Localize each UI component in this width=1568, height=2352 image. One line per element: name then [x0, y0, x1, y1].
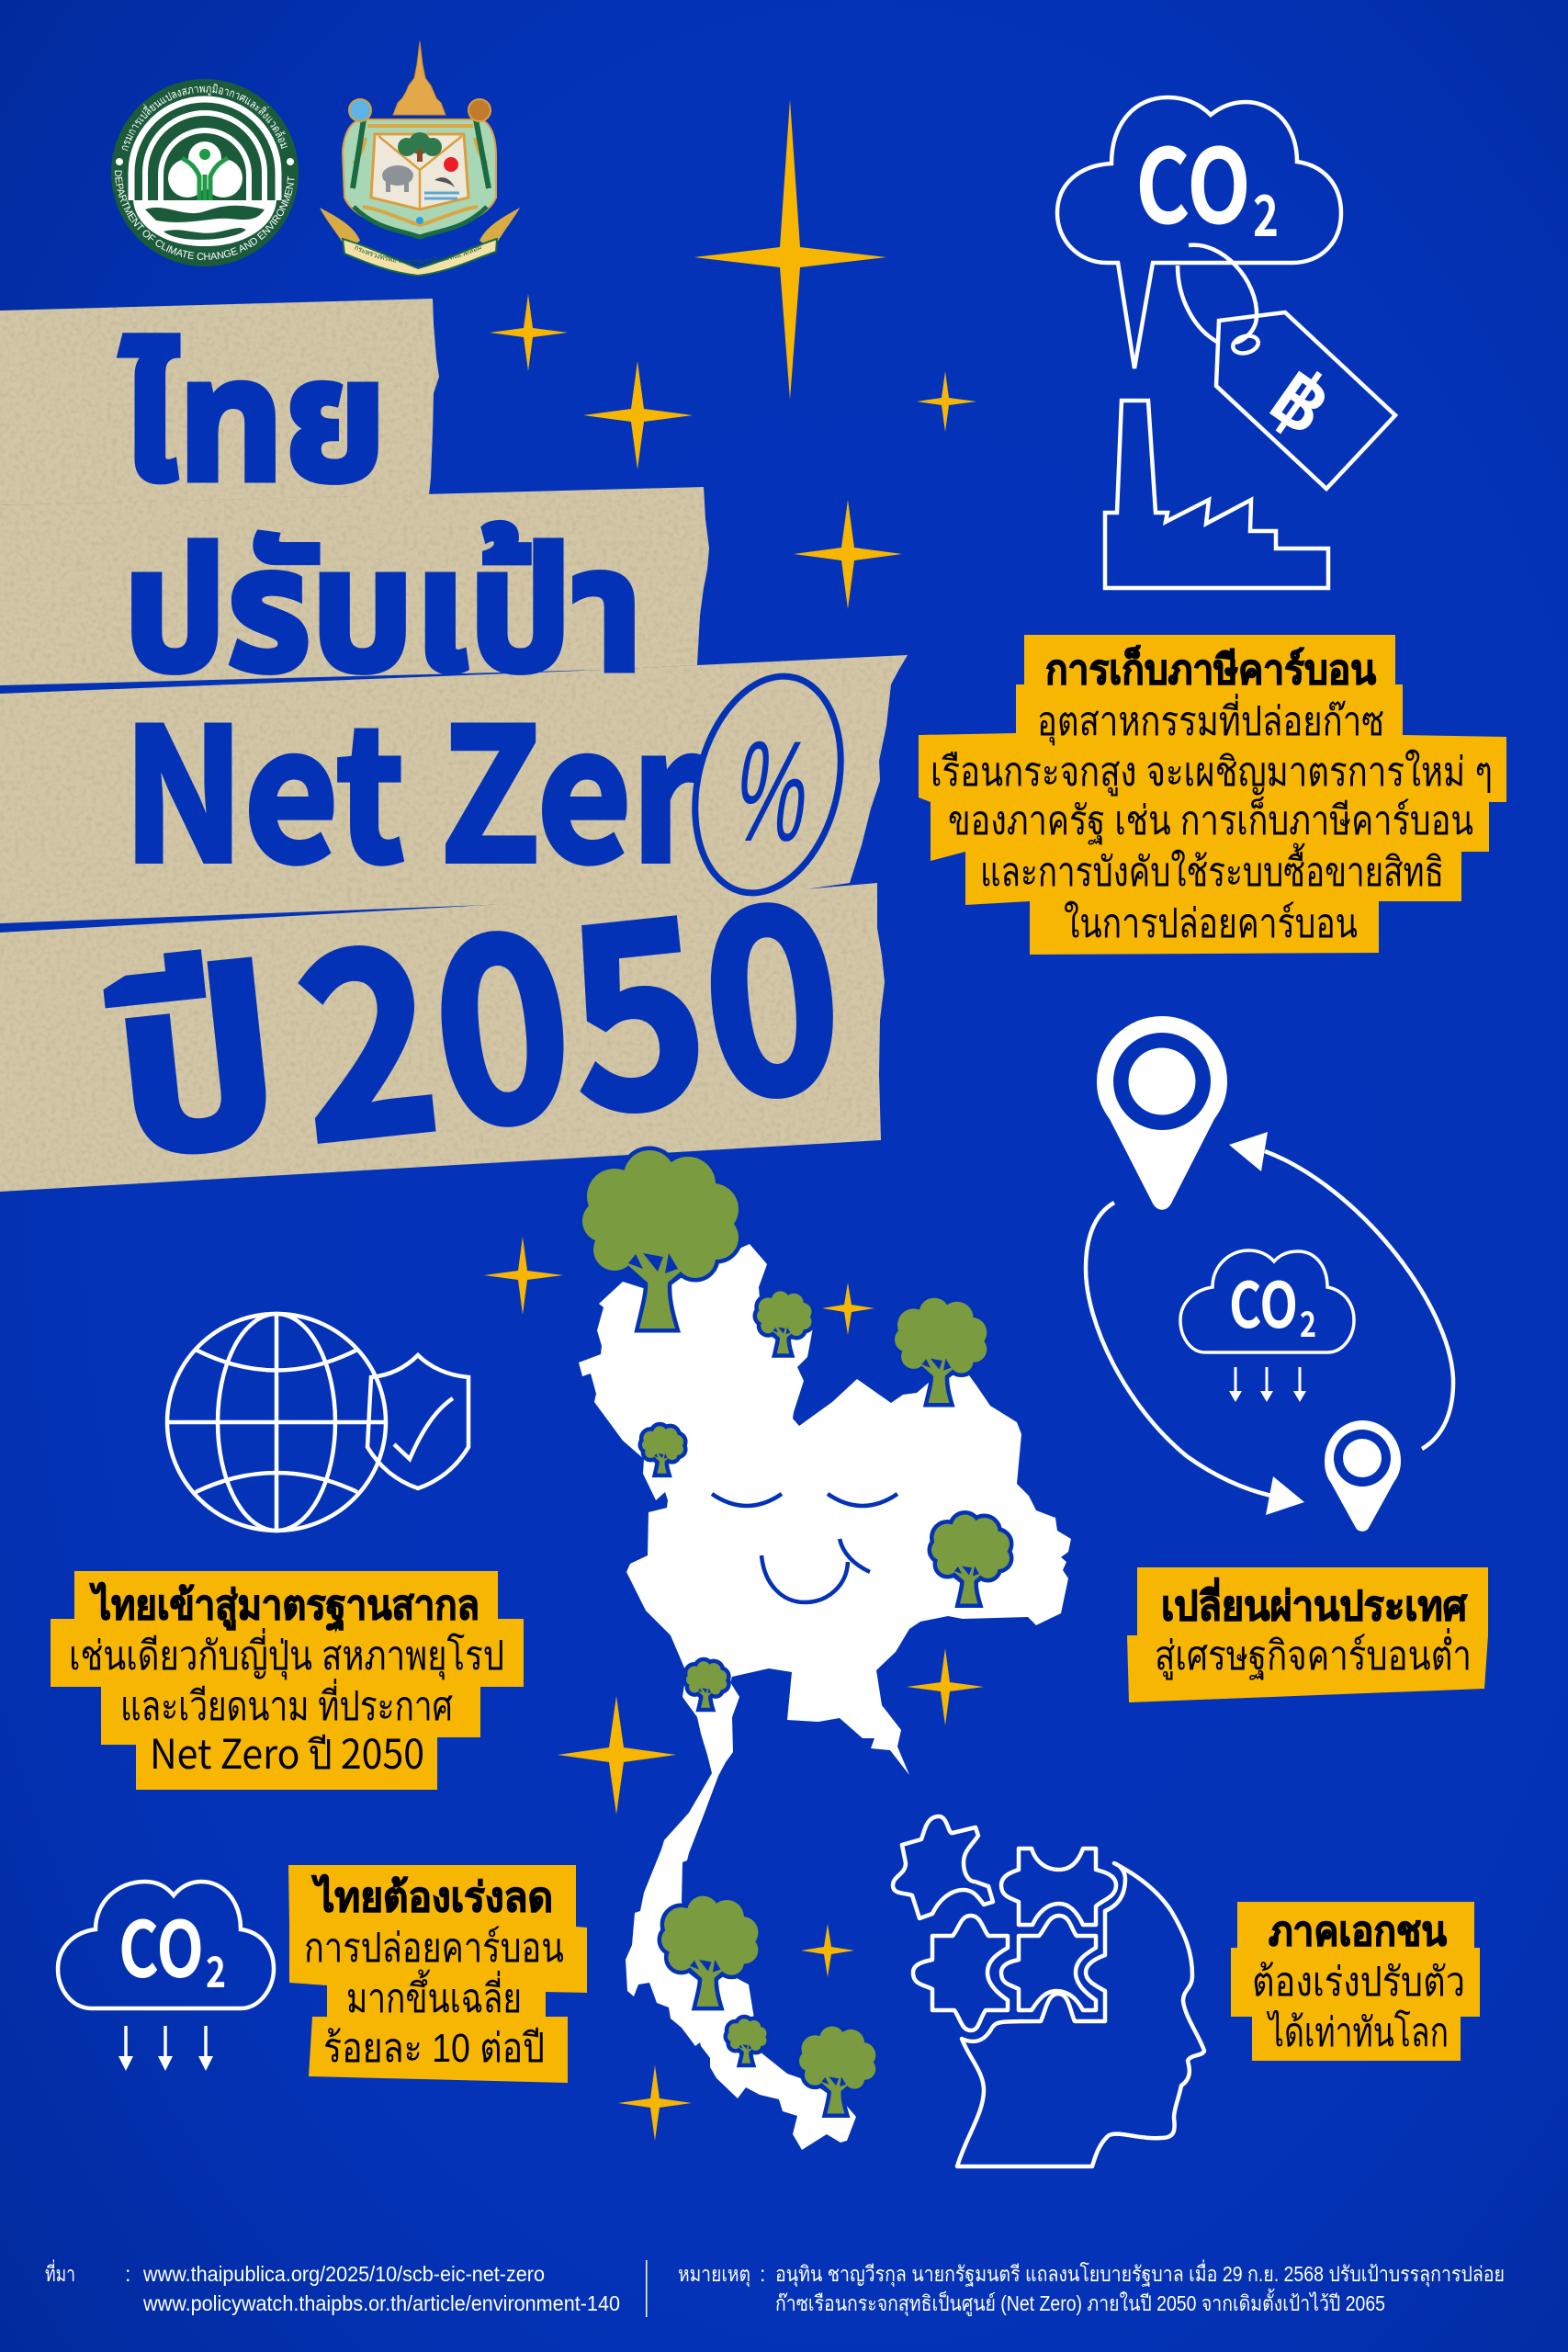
title — [94, 297, 863, 1265]
footer: note — [678, 2259, 1505, 2316]
callout: private sector: ต้องเร่งปรับตัว — [1252, 1960, 1465, 2005]
title line: year 2050: ปี — [96, 883, 298, 1265]
callout: international standard: และเวียดนาม ที่ประกาศ — [120, 1678, 453, 1729]
callout: international standard — [51, 1571, 524, 1790]
callout: transition — [1127, 1567, 1488, 1702]
callout: private sector: ได้เท่าทันโลก — [1267, 2009, 1449, 2055]
tree 9 — [799, 2026, 875, 2114]
callout: reduce emissions: มากขึ้นเฉลี่ย — [346, 1969, 522, 2021]
logo: Department of Climate Change and Environment — [111, 79, 299, 266]
tree 7 — [661, 1896, 758, 2007]
footer: sources — [45, 2259, 620, 2315]
CO2 label: CO — [1135, 105, 1251, 254]
head outline — [957, 1863, 1204, 2166]
paper strip 3 — [0, 655, 908, 923]
logo: Department of Climate Change and Environment: กรมการเปลี่ยนแปลงสภาพภูมิอากาศและสิ่งแวดล้อม — [121, 84, 288, 151]
tree 8 — [728, 2018, 766, 2064]
factory — [1105, 401, 1328, 588]
baht sign: ฿ — [1257, 352, 1346, 451]
callout: carbon tax — [919, 635, 1506, 955]
callout: carbon tax: ในการปล่อยคาร์บอน — [1064, 900, 1358, 946]
callout: reduce emissions: ไทยต้องเร่งลด — [311, 1873, 553, 1920]
title line: Net Zero: Net Zer — [123, 650, 702, 914]
title line: year 2050 — [94, 792, 860, 1265]
title line: raises target: ปรับเป้า — [123, 487, 643, 748]
icon: CO2 cloud with arrows — [58, 1882, 274, 2071]
small pin — [1325, 1420, 1401, 1532]
footer: sources: www.policywatch.thaipbs.or.th/article/environment-140 — [142, 2291, 620, 2315]
callout: international standard: Net Zero ปี 2050 — [150, 1722, 424, 1781]
percent circle — [673, 661, 863, 909]
footer divider — [646, 2260, 647, 2317]
callout: carbon tax: และการบังคับใช้ระบบซื้อขายสิทธิ — [980, 842, 1444, 895]
callout: reduce emissions — [288, 1865, 587, 2083]
puzzle piece A — [893, 1816, 993, 1918]
callout: carbon tax: อุตสาหกรรมที่ปล่อยก๊าซ — [1037, 693, 1384, 746]
map of Thailand — [579, 1244, 1071, 2150]
footer: sources: ที่มา — [45, 2259, 75, 2286]
icon: location pins, arrows and CO2 cloud: CO — [1229, 1255, 1298, 1346]
icon: CO2 cloud with arrows: 2 — [206, 1939, 226, 2000]
large pin — [1097, 1016, 1227, 1210]
stars — [484, 99, 984, 2141]
footer: sources: : — [125, 2262, 130, 2286]
title line: year 2050: 2050 — [279, 792, 857, 1216]
tree 4 — [642, 1426, 683, 1474]
title line: Thai: ไทย — [120, 297, 387, 558]
puzzle piece D — [1001, 1916, 1096, 2010]
icon: globe with shield — [167, 1314, 468, 1531]
icon: CO2 cloud with carbon price tag and factory — [1057, 97, 1395, 588]
middle cloud — [1180, 1250, 1354, 1352]
callout: transition: เปลี่ยนผ่านประเทศ — [1161, 1577, 1468, 1629]
callout: international standard: เช่นเดียวกับญี่ปุ่น สหภาพยุโรป — [69, 1627, 504, 1680]
tree 1 — [582, 1150, 739, 1329]
tree 6 — [686, 1661, 727, 1708]
icon: location pins, arrows and CO2 cloud — [1086, 1016, 1453, 1532]
callout: transition: สู่เศรษฐกิจคาร์บอนต่ำ — [1155, 1627, 1472, 1680]
callout: private sector — [1231, 1902, 1480, 2061]
map face — [712, 1494, 897, 1602]
footer: note: ก๊าซเรือนกระจกสุทธิเป็นศูนย์ (Net Zero) ภายในปี 2050 จากเดิมตั้งเป้าไว้ปี 2065 — [775, 2289, 1385, 2316]
paper strip 4 — [0, 883, 885, 1192]
price tag — [1216, 312, 1395, 489]
callout: carbon tax: การเก็บภาษีคาร์บอน — [1045, 645, 1376, 693]
paper strip 1 — [0, 299, 439, 505]
icon: CO2 cloud with carbon price tag and factory: 2 — [1253, 170, 1279, 253]
puzzle piece B — [1001, 1849, 1116, 1925]
puzzle piece C — [913, 1916, 1008, 2030]
cloud — [1057, 97, 1341, 368]
callout: international standard: ไทยเข้าสู่มาตรฐานสากล — [89, 1581, 479, 1631]
down arrows — [1229, 1367, 1306, 1402]
paper strip 2 — [0, 487, 709, 685]
arrow down — [1086, 1203, 1271, 1496]
logo: Ministry of Natural Resources and Environment crest: กระทรวงทรัพยากรธรรมชาติและสิ่งแวดล้อม — [355, 245, 481, 265]
logo: Department of Climate Change and Environment: DEPARTMENT OF CLIMATE CHANGE AND ENVIRONMENT — [114, 171, 294, 260]
tree 5 — [931, 1514, 1010, 1604]
icon: head with puzzle pieces — [893, 1816, 1204, 2166]
panel: torn paper title strips — [0, 299, 908, 1192]
icon: CO2 cloud with arrows: CO — [118, 1889, 204, 2000]
footer: sources: www.thaipublica.org/2025/10/scb-eic-net-zero — [142, 2262, 545, 2286]
footer: note: หมายเหตุ — [678, 2262, 750, 2287]
callout: reduce emissions: การปล่อยคาร์บอน — [304, 1926, 564, 1971]
percent circle: % — [726, 711, 819, 871]
tree 3 — [895, 1298, 987, 1403]
callout: reduce emissions: ร้อยละ 10 ต่อปี — [323, 2026, 545, 2071]
footer: note: : — [760, 2262, 765, 2286]
trees on map — [582, 1150, 1010, 2114]
tree 2 — [757, 1291, 812, 1353]
icon: location pins, arrows and CO2 cloud: 2 — [1300, 1296, 1316, 1347]
callout: private sector: ภาคเอกชน — [1269, 1909, 1447, 1954]
logo: Ministry of Natural Resources and Environment crest — [320, 41, 520, 277]
arrow up — [1265, 1151, 1453, 1449]
